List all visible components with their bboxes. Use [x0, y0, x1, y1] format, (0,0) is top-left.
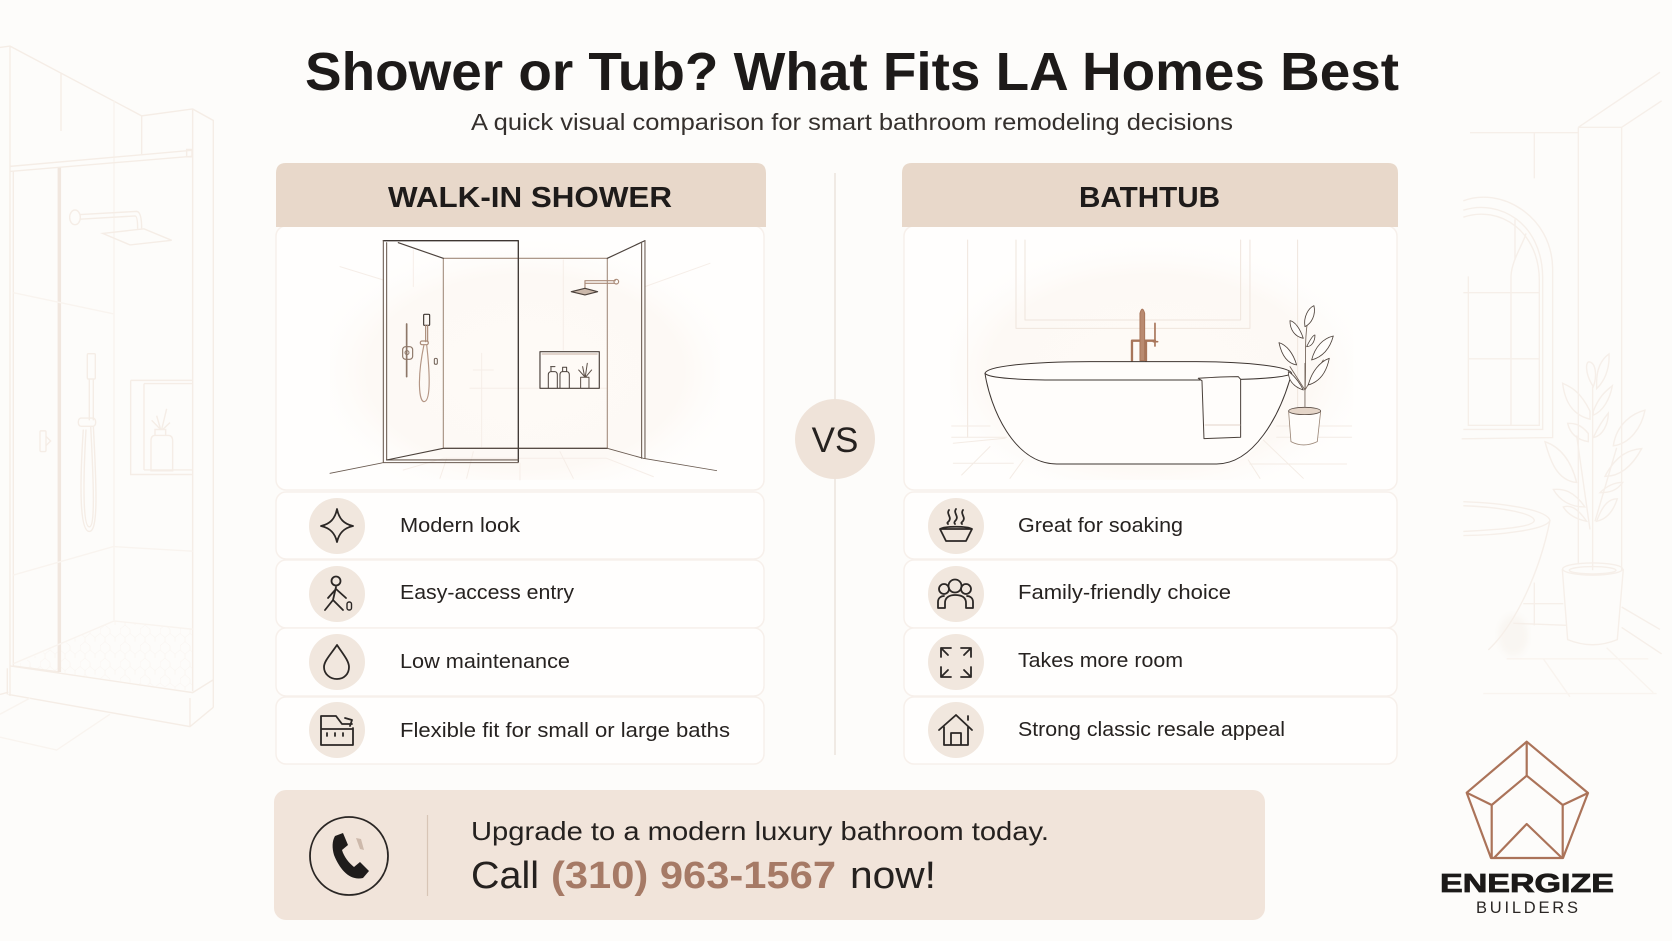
icon: phone — [310, 817, 388, 895]
icon: expand arrows — [941, 648, 971, 677]
feature: great for soaking — [904, 492, 1397, 559]
panel header: walk-in shower — [276, 163, 766, 227]
feature: flexible fit — [276, 697, 764, 764]
feature: easy-access entry: Easy-access entry — [400, 581, 575, 604]
call to action banner — [274, 790, 1265, 920]
divider between panels — [834, 173, 836, 755]
call to action text: now! — [850, 855, 936, 897]
icon: water drop — [324, 645, 349, 679]
subtitle: A quick visual comparison for smart bathroom remodeling decisions — [471, 109, 1233, 135]
panel: walk-in shower — [276, 163, 766, 764]
icon: house — [939, 715, 972, 745]
panel header: walk-in shower: WALK-IN SHOWER — [388, 182, 672, 214]
logo: Energize Builders: BUILDERS — [1476, 899, 1578, 917]
icon: steaming bowl — [940, 509, 972, 541]
logo wordmark: ENERGIZE — [1440, 868, 1614, 898]
call to action text: (310) 963-1567 — [551, 855, 836, 897]
feature: takes more room: Takes more room — [1018, 649, 1183, 672]
background illustration: bathtub, window and plant sketch — [1462, 72, 1662, 697]
feature: strong classic resale appeal — [904, 697, 1397, 764]
panel header: bathtub: BATHTUB — [1079, 182, 1220, 214]
feature: modern look: Modern look — [400, 514, 521, 537]
feature: great for soaking: Great for soaking — [1018, 514, 1183, 537]
call to action text: Upgrade to a modern luxury bathroom today. — [471, 816, 1049, 846]
feature: easy-access entry — [276, 560, 764, 628]
panel header: bathtub — [902, 163, 1398, 227]
illustration: walk-in shower — [330, 240, 720, 480]
feature: flexible fit: Flexible fit for small or large baths — [400, 719, 730, 742]
title: Shower or Tub? What Fits LA Homes Best — [305, 42, 1399, 102]
call to action text: Call — [471, 855, 539, 897]
feature: modern look — [276, 492, 764, 559]
icon: floor plan with ruler — [321, 716, 353, 745]
icon: family — [938, 580, 973, 608]
feature: low maintenance: Low maintenance — [400, 650, 570, 673]
feature: takes more room — [904, 628, 1397, 696]
feature: family-friendly choice: Family-friendly choice — [1018, 581, 1231, 604]
icon: sparkle — [321, 509, 353, 542]
feature: strong classic resale appeal: Strong classic resale appeal — [1018, 718, 1285, 741]
VS badge: VS — [812, 421, 858, 460]
logo: Energize Builders — [1440, 742, 1614, 917]
icon: walking person — [325, 576, 352, 610]
feature: family-friendly choice — [904, 560, 1397, 628]
logo mark — [1467, 742, 1588, 858]
call to action text — [471, 816, 1049, 897]
feature: low maintenance — [276, 628, 764, 696]
illustration card: bathtub — [904, 226, 1397, 490]
VS badge — [795, 399, 875, 479]
illustration card: shower — [276, 226, 764, 490]
illustration: bathtub — [950, 240, 1353, 480]
background illustration: shower sketch — [0, 46, 213, 750]
panel: bathtub — [902, 163, 1398, 764]
